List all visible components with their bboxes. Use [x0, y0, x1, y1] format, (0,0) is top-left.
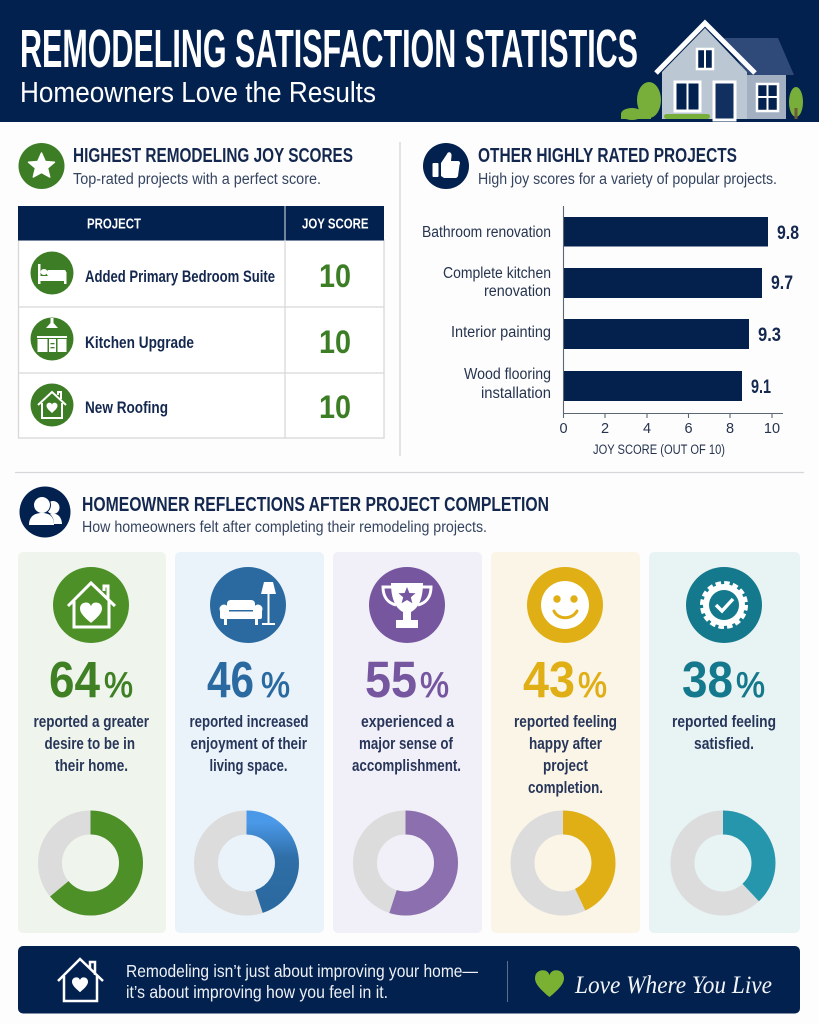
- icon: people: [20, 486, 70, 538]
- panel: other highly rated projects: [422, 143, 799, 457]
- subheading: High joy scores for a variety of popular projects.: [478, 171, 777, 188]
- description: accomplishment.: [352, 757, 461, 775]
- bar: interior painting: [451, 319, 781, 349]
- heading: HIGHEST REMODELING JOY SCORES: [73, 144, 353, 167]
- description: project: [543, 757, 588, 775]
- icon: house illustration: [621, 23, 803, 120]
- card: 38 percent: [649, 552, 800, 933]
- card: 55 percent: [333, 552, 482, 933]
- description: [34, 713, 149, 775]
- donut chart: [365, 822, 446, 904]
- icon: kitchen: [30, 318, 74, 360]
- donut chart: [522, 822, 604, 904]
- bar: complete kitchen renovation: 9.7: [771, 273, 793, 294]
- heading: OTHER HIGHLY RATED PROJECTS: [478, 144, 737, 167]
- bar: bathroom renovation: 9.8: [777, 223, 799, 244]
- description: [190, 713, 308, 775]
- stat: 43: [523, 651, 575, 708]
- row: bedroom suite: Added Primary Bedroom Suite: [85, 267, 275, 286]
- icon: smiley: [527, 567, 603, 643]
- description: [514, 713, 617, 797]
- bar: complete kitchen renovation: Complete kitchen: [443, 265, 551, 282]
- row: kitchen upgrade: 10: [319, 324, 351, 360]
- subheading: How homeowners felt after completing their remodeling projects.: [82, 519, 487, 536]
- icon: star: [18, 143, 64, 189]
- row: bedroom suite: 10: [319, 258, 351, 294]
- message: Remodeling isn’t just about improving your home—: [126, 961, 478, 981]
- table: [18, 206, 384, 438]
- stat: 55: [365, 651, 417, 708]
- bar: complete kitchen renovation: [443, 265, 793, 300]
- description: [352, 713, 461, 775]
- chart axes: JOY SCORE (OUT OF 10): [593, 442, 725, 457]
- panel: highest joy scores: [18, 143, 384, 438]
- icon: green heart: [535, 970, 564, 997]
- row: kitchen upgrade: Kitchen Upgrade: [85, 333, 194, 352]
- header banner: [0, 0, 819, 122]
- chart axes: 0: [559, 421, 568, 437]
- card: 43 percent: [491, 552, 640, 933]
- icon: badge check: [686, 567, 762, 643]
- icon: trophy: [369, 567, 445, 643]
- row: new roofing: [30, 384, 351, 426]
- stat: %: [736, 666, 765, 705]
- icon: house with heart: [30, 384, 74, 426]
- description: satisfied.: [694, 735, 754, 753]
- stat: [365, 651, 449, 708]
- card: 64 percent: [18, 552, 166, 933]
- message: it’s about improving how you feel in it.: [126, 982, 388, 1002]
- chart axes: 8: [726, 421, 734, 437]
- stat: [682, 651, 765, 708]
- stat: %: [578, 666, 607, 705]
- message: [126, 961, 478, 1002]
- chart axes: [559, 206, 783, 457]
- icon: home with heart: [53, 567, 129, 643]
- bar: wood flooring installation: 9.1: [751, 377, 771, 398]
- tagline: Love Where You Live: [574, 972, 772, 999]
- bar: wood flooring installation: [464, 366, 771, 402]
- bar: interior painting: Interior painting: [451, 324, 551, 341]
- bar: interior painting: 9.3: [758, 325, 781, 346]
- donut chart: [682, 822, 764, 904]
- description: desire to be in: [44, 735, 135, 753]
- description: enjoyment of their: [190, 735, 307, 753]
- chart axes: 4: [643, 421, 651, 437]
- icon: house with heart: [58, 959, 103, 1001]
- description: living space.: [210, 757, 288, 775]
- chart axes: 10: [764, 421, 780, 437]
- stat: 64: [49, 651, 101, 708]
- description: [672, 713, 776, 753]
- donut chart: [206, 822, 287, 904]
- bar: wood flooring installation: installation: [481, 385, 551, 402]
- icon: thumbs up: [423, 143, 469, 189]
- icon: bed: [30, 252, 74, 294]
- bar chart: [422, 206, 799, 457]
- column header: joy score: JOY SCORE: [302, 216, 369, 232]
- description: reported feeling: [514, 713, 617, 731]
- card: 46 percent: [175, 552, 324, 933]
- row: new roofing: 10: [319, 389, 351, 425]
- row: bedroom suite: [30, 252, 351, 294]
- description: experienced a: [361, 713, 455, 731]
- row: kitchen upgrade: [30, 318, 351, 360]
- icon: sofa and lamp: [210, 567, 286, 643]
- bar: bathroom renovation: [422, 217, 799, 246]
- section: homeowner reflections heading: [20, 486, 549, 538]
- stat: [207, 651, 290, 708]
- stat: [49, 651, 133, 708]
- description: their home.: [55, 757, 128, 775]
- footer banner: [18, 946, 800, 1014]
- subheading: Top-rated projects with a perfect score.: [73, 171, 321, 188]
- subtitle: Homeowners Love the Results: [20, 77, 376, 109]
- description: completion.: [528, 779, 603, 797]
- stat: %: [104, 666, 133, 705]
- row: new roofing: New Roofing: [85, 398, 168, 417]
- chart axes: 6: [684, 421, 693, 437]
- heading: HOMEOWNER REFLECTIONS AFTER PROJECT COMPLETION: [82, 493, 549, 516]
- stat: 38: [682, 651, 733, 708]
- stat: %: [261, 666, 290, 705]
- stat: [523, 651, 607, 708]
- description: reported feeling: [672, 713, 776, 731]
- stat: 46: [207, 651, 254, 708]
- column header: project: PROJECT: [87, 216, 141, 232]
- description: happy after: [529, 735, 602, 753]
- bar: wood flooring installation: Wood flooring: [464, 366, 551, 383]
- bar: complete kitchen renovation: renovation: [484, 283, 551, 300]
- bar: bathroom renovation: Bathroom renovation: [422, 224, 551, 241]
- donut chart: [50, 822, 131, 904]
- stat: %: [420, 666, 449, 705]
- description: reported increased: [190, 713, 308, 731]
- chart axes: 2: [601, 421, 609, 437]
- description: reported a greater: [34, 713, 149, 731]
- description: major sense of: [359, 735, 453, 753]
